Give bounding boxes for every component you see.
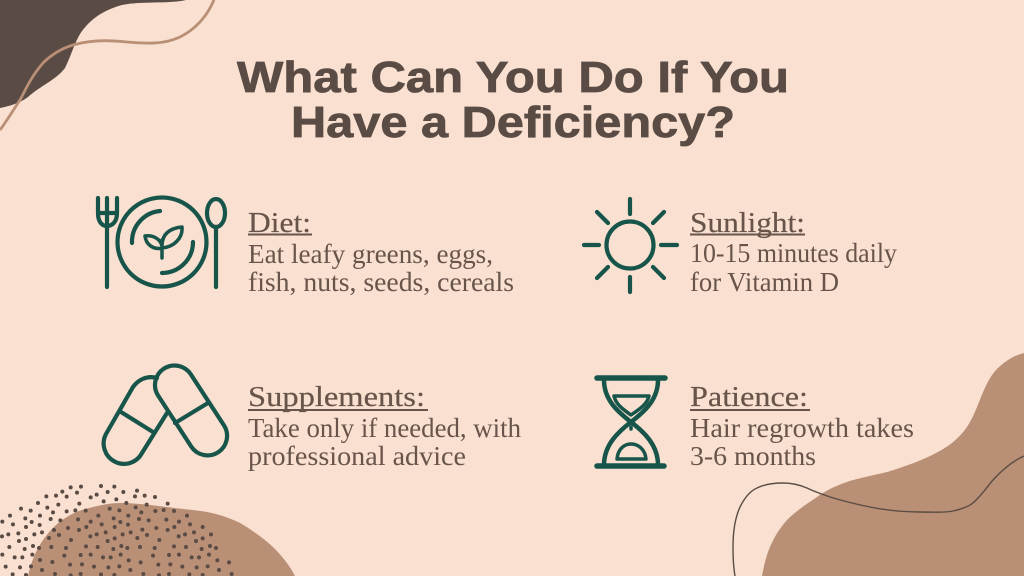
dot pattern: bottom-left bbox=[2, 486, 232, 575]
title bbox=[237, 53, 789, 147]
text: sunlight: for Vitamin D bbox=[690, 267, 839, 297]
text: diet: Eat leafy greens, eggs, bbox=[248, 239, 493, 269]
blob: top-left dark shape bbox=[0, 0, 186, 108]
curve: top-left tan line bbox=[0, 0, 214, 130]
icon: hourglass bbox=[597, 378, 665, 466]
text: sunlight: 10-15 minutes daily bbox=[690, 238, 897, 268]
text: patience bbox=[690, 381, 914, 471]
text: sunlight: Sunlight: bbox=[690, 207, 805, 239]
blob: bottom-left brown shape bbox=[28, 503, 295, 576]
text: supplements: Supplements: bbox=[248, 381, 425, 413]
icon: plate with fork and spoon bbox=[98, 198, 225, 287]
title: What Can You Do If You bbox=[237, 53, 789, 102]
title: Have a Deficiency? bbox=[291, 98, 735, 147]
text: patience: Patience: bbox=[690, 381, 808, 413]
text: supplements: Take only if needed, with bbox=[248, 413, 521, 443]
blob: bottom-right brown shape bbox=[762, 353, 1024, 576]
text: diet: fish, nuts, seeds, cereals bbox=[248, 267, 514, 297]
text: sunlight bbox=[690, 207, 897, 297]
text: patience: 3-6 months bbox=[690, 441, 816, 471]
icon: capsules bbox=[104, 358, 235, 464]
icon: sun bbox=[584, 199, 677, 292]
text: patience: Hair regrowth takes bbox=[690, 413, 914, 443]
text: diet bbox=[248, 207, 514, 297]
text: diet: Diet: bbox=[248, 207, 311, 239]
text: supplements bbox=[248, 381, 521, 471]
text: supplements: professional advice bbox=[248, 441, 466, 471]
curve: bottom-right thin line bbox=[733, 456, 1024, 576]
